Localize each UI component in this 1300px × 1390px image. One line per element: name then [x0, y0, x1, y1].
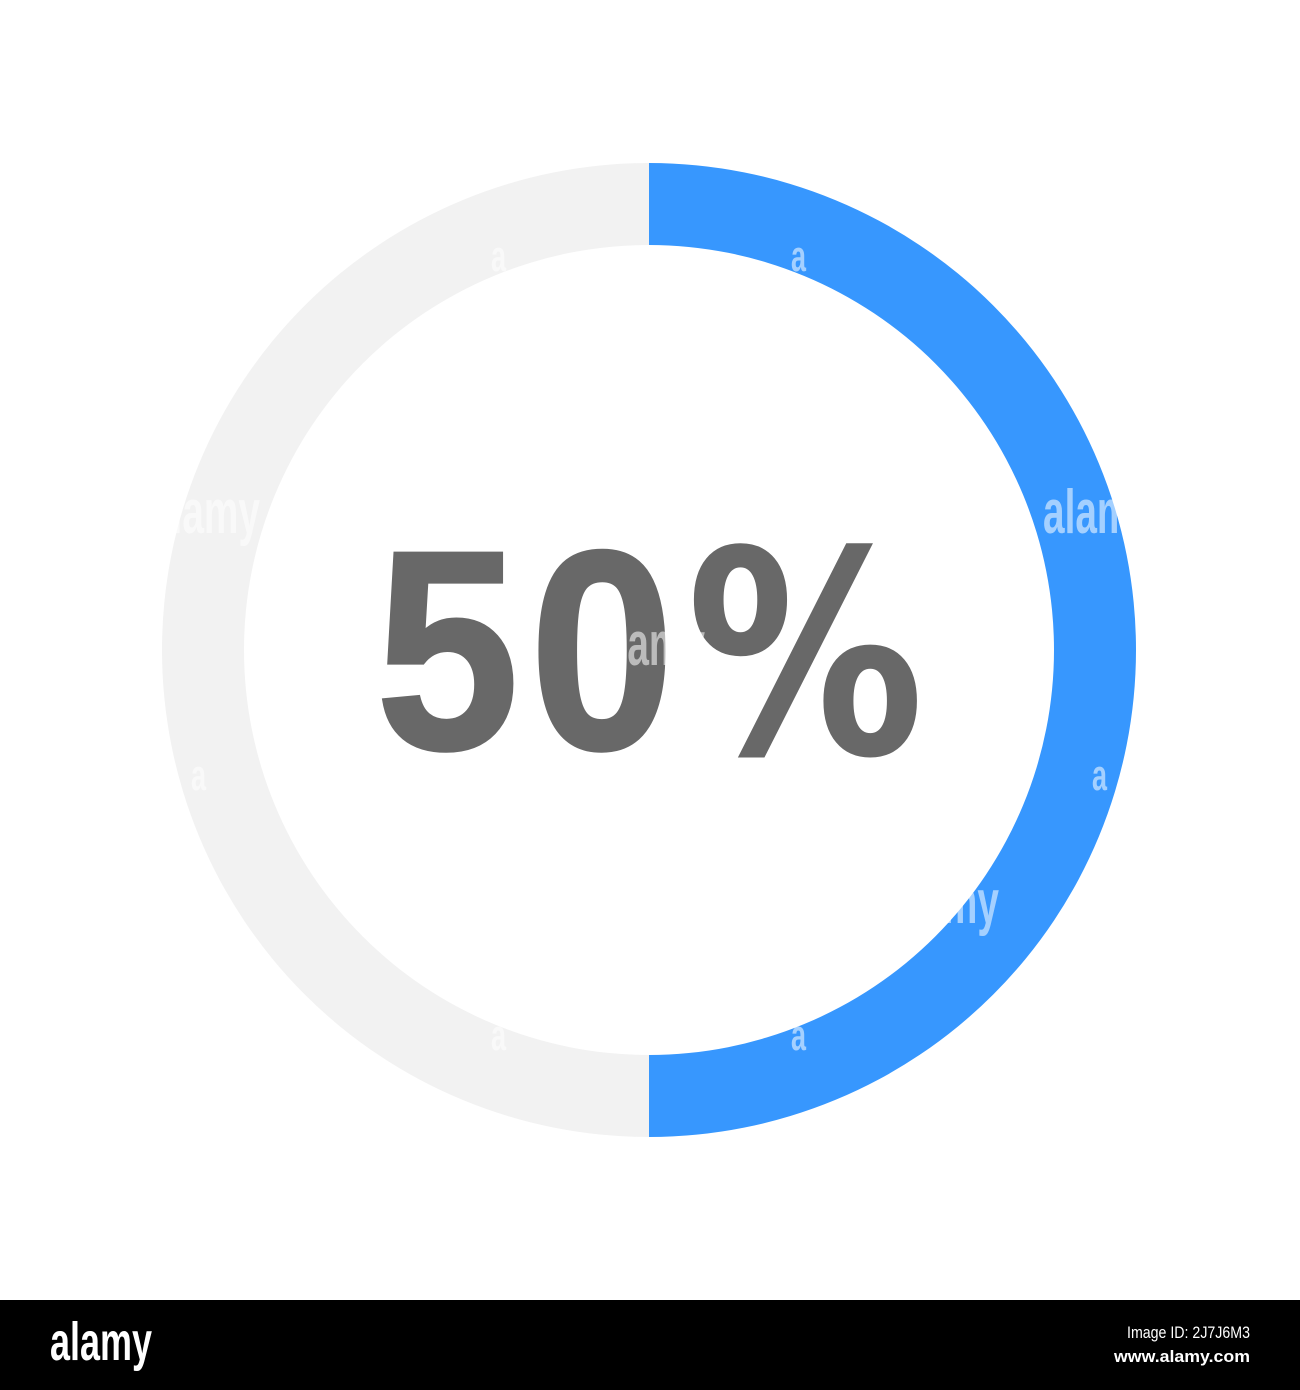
stock watermarks: a [491, 1011, 506, 1060]
footer bar [0, 1300, 1300, 1390]
stock watermarks: alamy [595, 610, 705, 679]
footer logo: alamy [50, 1312, 152, 1372]
stock watermarks: alamy [1043, 478, 1153, 547]
stock watermarks [150, 232, 1153, 1060]
percentage value [376, 491, 924, 820]
stock watermarks: alamy [150, 478, 260, 547]
stock watermarks: a [791, 232, 806, 281]
stock watermarks: a [191, 751, 206, 800]
image id: Image ID: 2J7J6M3 [1127, 1323, 1250, 1342]
website: www.alamy.com [1113, 1347, 1250, 1366]
stock watermarks: a [1092, 751, 1107, 800]
stock watermarks: a [491, 232, 506, 281]
stock watermarks: alamy [889, 868, 999, 937]
percentage value: 0 [530, 491, 675, 809]
ring: 50% progress arc [649, 163, 1136, 1137]
percentage value: 5 [376, 491, 519, 809]
progress ring [162, 163, 1136, 1137]
ring: remaining track [162, 163, 649, 1137]
stock watermarks: a [791, 1011, 806, 1060]
percentage value: % [687, 492, 924, 820]
